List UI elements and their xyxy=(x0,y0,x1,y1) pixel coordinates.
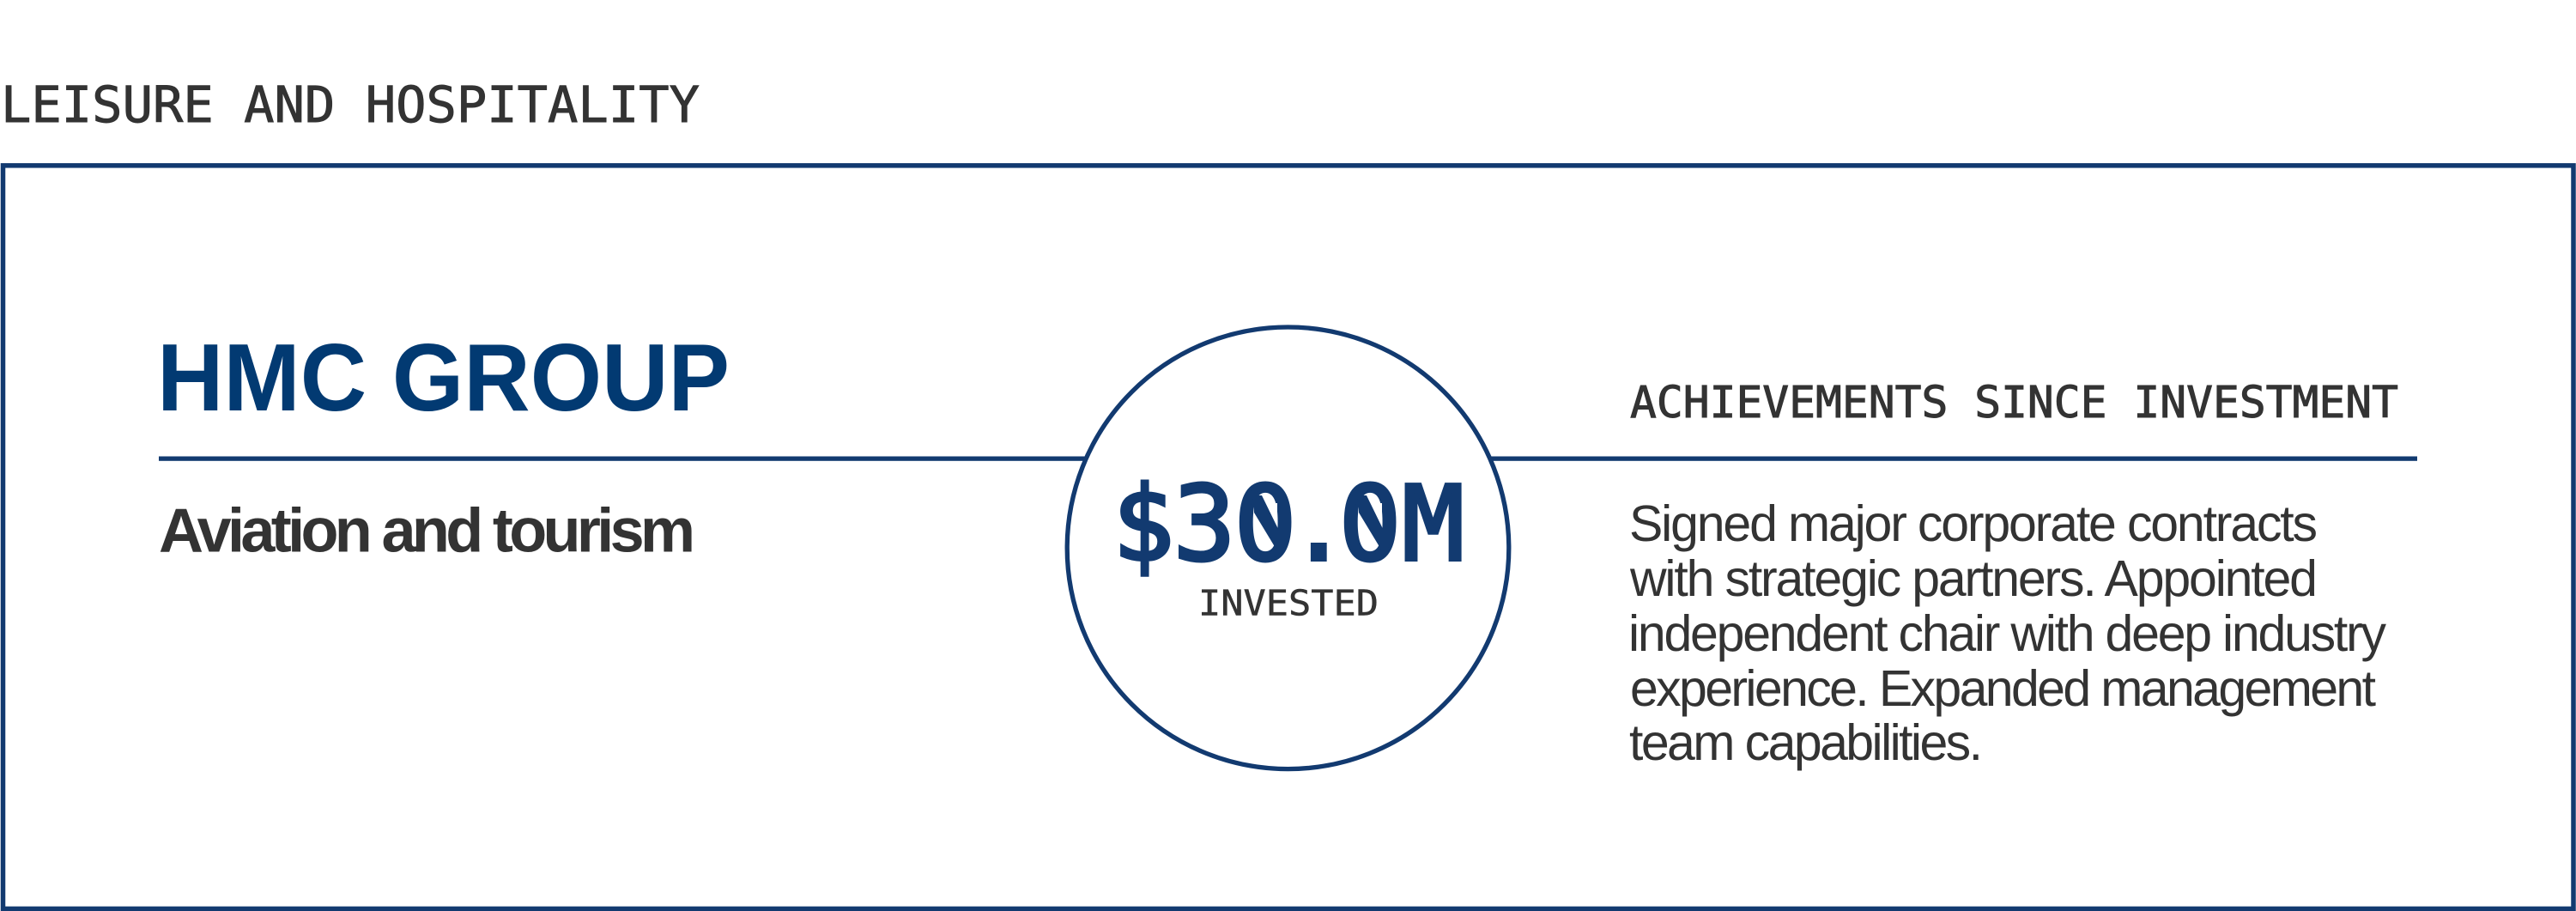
invested label: INVESTED xyxy=(1198,582,1379,623)
achievements text: team capabilities. xyxy=(1629,714,1983,771)
circle outline xyxy=(1067,327,1509,769)
achievements text: with strategic partners. Appointed xyxy=(1629,550,2318,607)
invested amount: $30.0M xyxy=(1112,465,1464,585)
achievements heading: ACHIEVEMENTS SINCE INVESTMENT xyxy=(1630,377,2398,428)
achievements text: experience. Expanded management xyxy=(1630,660,2376,717)
company name: HMC GROUP xyxy=(157,325,730,431)
zero slash 1 xyxy=(1254,495,1280,550)
achievements text: Signed major corporate contracts xyxy=(1629,495,2318,552)
sector label: Aviation and tourism xyxy=(159,496,695,565)
achievements text: independent chair with deep industry xyxy=(1628,605,2386,662)
zero slash 2 xyxy=(1359,495,1385,550)
achievements text xyxy=(1628,495,2386,771)
right rule xyxy=(1489,457,2417,461)
investment circle xyxy=(1067,327,1509,769)
section heading: LEISURE AND HOSPITALITY xyxy=(1,76,700,134)
left rule xyxy=(159,457,1086,461)
